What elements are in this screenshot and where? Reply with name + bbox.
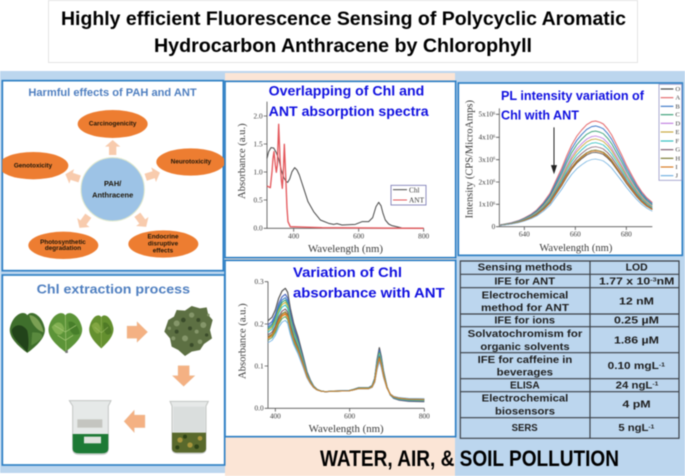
node: carcinogenicity: Carcinogenicity [89,121,137,128]
chart: Chl absorbance series: 800 [419,412,430,421]
table: sensing methods and LOD: IFE for ions [494,316,555,327]
panel: Chl extraction process [2,275,225,465]
table: sensing methods and LOD: Electrochemical [482,394,568,405]
table: sensing methods and LOD [460,261,679,438]
node: neurotoxicity [156,148,225,176]
table: sensing methods and LOD: -1 [659,362,665,368]
legend [659,84,682,180]
node: neurotoxicity: Neurotoxicity [171,159,212,166]
chart: Chl and ANT absorbance: 1.0 [253,168,263,177]
node: photosynthetic degradation [28,232,98,259]
table: sensing methods and LOD: -1 [652,382,658,388]
legend: B [675,103,680,110]
chart: PL intensity curves: 6 [493,156,496,161]
series: Chl [267,148,424,228]
chart: PL intensity curves: 1x10 [479,200,493,209]
chart: PL intensity curves: 680 [621,230,632,239]
table: sensing methods and LOD: 0.25 µM [614,316,659,327]
footer heading: water, air and soil pollution: WATER, AIR, & SOIL POLLUTION [320,446,619,471]
node: genotoxicity [0,152,68,179]
image: beaker with green extract [69,401,111,454]
chart: PL intensity curves: 6 [493,110,496,115]
centre circle: PAH/Anthracene: PAH/ [104,179,121,188]
centre circle: PAH/Anthracene: Anthracene [92,190,133,199]
image: leaf 2 [48,313,82,353]
legend: F [675,138,679,145]
node: endocrine disruptive effects: disruptive [148,241,179,248]
chart: PL intensity curves: 2x10 [479,177,493,186]
chart: PL intensity curves: 0 [492,222,496,231]
table: sensing methods and LOD: beverages [497,368,553,379]
heading: overlapping: Overlapping of Chl and [269,84,424,99]
table: sensing methods and LOD: 24 ngL [616,380,647,391]
heading: variation: Variation of Chl [293,265,402,280]
table: sensing methods and LOD: IFE for caffeine in [478,355,572,366]
series: ANT [267,124,424,228]
heading: PL intensity: PL intensity variation of [501,89,645,103]
table: sensing methods and LOD: -1 [648,424,654,430]
chart: PL intensity curves: 660 [570,230,581,239]
chart: PL intensity curves: Intensity (CPS/MicroAmps) [464,100,475,218]
table: sensing methods and LOD: 4 pM [622,400,651,411]
arrow: to photosynthetic degradation [73,211,95,232]
chart: Chl and ANT absorbance: 400 [288,232,299,241]
legend: I [675,164,678,171]
chart: Chl absorbance series: 0.1 [254,361,264,370]
chart: PL intensity curves: Wavelength (nm) [539,243,612,254]
table: sensing methods and LOD: -3 [650,278,657,284]
panel: PL intensity variation [458,83,682,255]
table: sensing methods and LOD: ELISA [510,380,540,391]
table: sensing methods and LOD: 0.10 mgL [608,361,650,372]
table: sensing methods and LOD: nM [657,276,674,287]
table: sensing methods and LOD: Solvatochromism for [468,329,583,340]
chart: PL intensity curves: 6 [493,200,496,205]
chart: Chl absorbance series: 400 [270,412,281,421]
centre circle: PAH/Anthracene [81,158,144,221]
chart: Chl and ANT absorbance: 2.0 [253,112,263,121]
chart: PL intensity curves: 6 [493,133,496,138]
heading: extraction: Chl extraction process [37,281,190,296]
panel: harmful effects of PAH and ANT [0,81,225,271]
chart: Chl absorbance series: 0.3 [254,277,264,286]
arrow: leaves to dried powder [127,322,148,342]
legend: A [675,95,680,102]
heading: variation: absorbance with ANT [293,286,445,301]
chart: Chl and ANT absorbance: Absorbance (a.u.) [237,123,248,199]
node: photosynthetic degradation: Photosynthetic [40,239,86,246]
table: sensing methods and LOD: 1.86 µM [614,335,659,346]
table: sensing methods and LOD: Sensing methods [478,263,572,274]
chart: Chl absorbance series: Absorbance (a.u.) [237,303,248,379]
chart: Chl absorbance series: 0.0 [254,404,264,413]
node: photosynthetic degradation: degradation [45,245,81,252]
node: endocrine disruptive effects: Endocrine [148,234,179,241]
panel: overlapping absorption spectra [225,81,456,258]
heading: overlapping: ANT absorption spectra [269,104,429,119]
chart: Chl and ANT absorbance [237,102,429,255]
node: endocrine disruptive effects: effects [153,247,174,254]
table: sensing methods and LOD: LOD [626,263,648,274]
heading: harmful effects: Harmful effects of PAH and ANT [28,87,197,99]
table: sensing methods and LOD: IFE for ANT [494,276,555,287]
chart: Chl and ANT absorbance: 800 [418,232,429,241]
arrow: to neurotoxicity [143,165,162,185]
series group [268,288,424,402]
series group [499,121,652,226]
legend [391,185,426,205]
heading: overlapping [269,84,429,119]
table: sensing methods and LOD: 1.77 x 10 [599,276,639,287]
chart: Chl absorbance series: 600 [344,412,355,421]
legend: ANT [409,196,425,205]
background: central peach column [225,73,455,476]
legend: Chl [409,185,420,194]
image: dried leaves pile [164,306,213,356]
chart: Chl absorbance series: Wavelength (nm) [309,424,384,435]
chart: PL intensity curves [464,100,652,254]
chart: PL intensity curves: 3x10 [479,155,493,164]
heading: PL intensity [501,89,645,122]
title: Highly efficient Fluorescence Sensing of Polycyclic Aromatic [61,8,626,30]
arrow: to genotoxicity [63,167,82,186]
node: genotoxicity: Genotoxicity [14,162,53,169]
chart: Chl absorbance series: 0.2 [254,319,264,328]
legend: H [675,155,680,162]
chart: Chl and ANT absorbance: 0.5 [253,196,263,205]
node: endocrine disruptive effects [128,230,198,258]
table: sensing methods and LOD: 12 nM [619,296,654,307]
heading: PL intensity: Chl with ANT [501,108,579,122]
legend: C [675,112,680,119]
chart: Chl and ANT absorbance: 0.0 [253,224,263,233]
node: carcinogenicity [78,110,148,138]
chart: Chl and ANT absorbance: 1.5 [253,140,263,149]
legend: G [675,147,680,154]
arrow: to carcinogenicity [105,140,120,155]
chart: PL intensity curves: 4x10 [479,133,493,142]
arrow: to endocrine effects [131,210,152,231]
chart: Chl and ANT absorbance: Wavelength (nm) [308,244,383,255]
chart: Chl absorbance series [237,277,430,435]
chart: PL intensity curves: 5x10 [479,110,493,119]
heading: variation [293,265,445,301]
chart: PL intensity curves: 6 [493,178,496,183]
image: leaf 3 [89,315,113,348]
legend: O [675,86,680,93]
arrow: powder to beaker [172,366,195,386]
table: sensing methods and LOD: SERS [512,423,538,434]
chart: Chl and ANT absorbance: 600 [353,232,364,241]
table: sensing methods and LOD: method for ANT [481,303,569,314]
table: sensing methods and LOD: 5 ngL [618,423,644,434]
legend: D [675,120,680,127]
panel: variation of Chl absorbance [225,260,456,437]
title: Hydrocarbon Anthracene by Chlorophyll [154,35,532,57]
image: leaf 1 [10,313,45,353]
table: sensing methods and LOD: biosensors [495,406,555,417]
arrow: decreasing intensity [552,127,556,173]
legend: J [675,173,678,180]
chart: PL intensity curves: 640 [519,230,530,239]
title [48,0,638,62]
image: beaker with leaves in solvent [170,401,208,453]
table: sensing methods and LOD: organic solvents [480,342,570,353]
table: sensing methods and LOD: Electrochemical [482,290,568,301]
arrow: beaker to extract [124,410,145,433]
legend: E [675,129,679,136]
